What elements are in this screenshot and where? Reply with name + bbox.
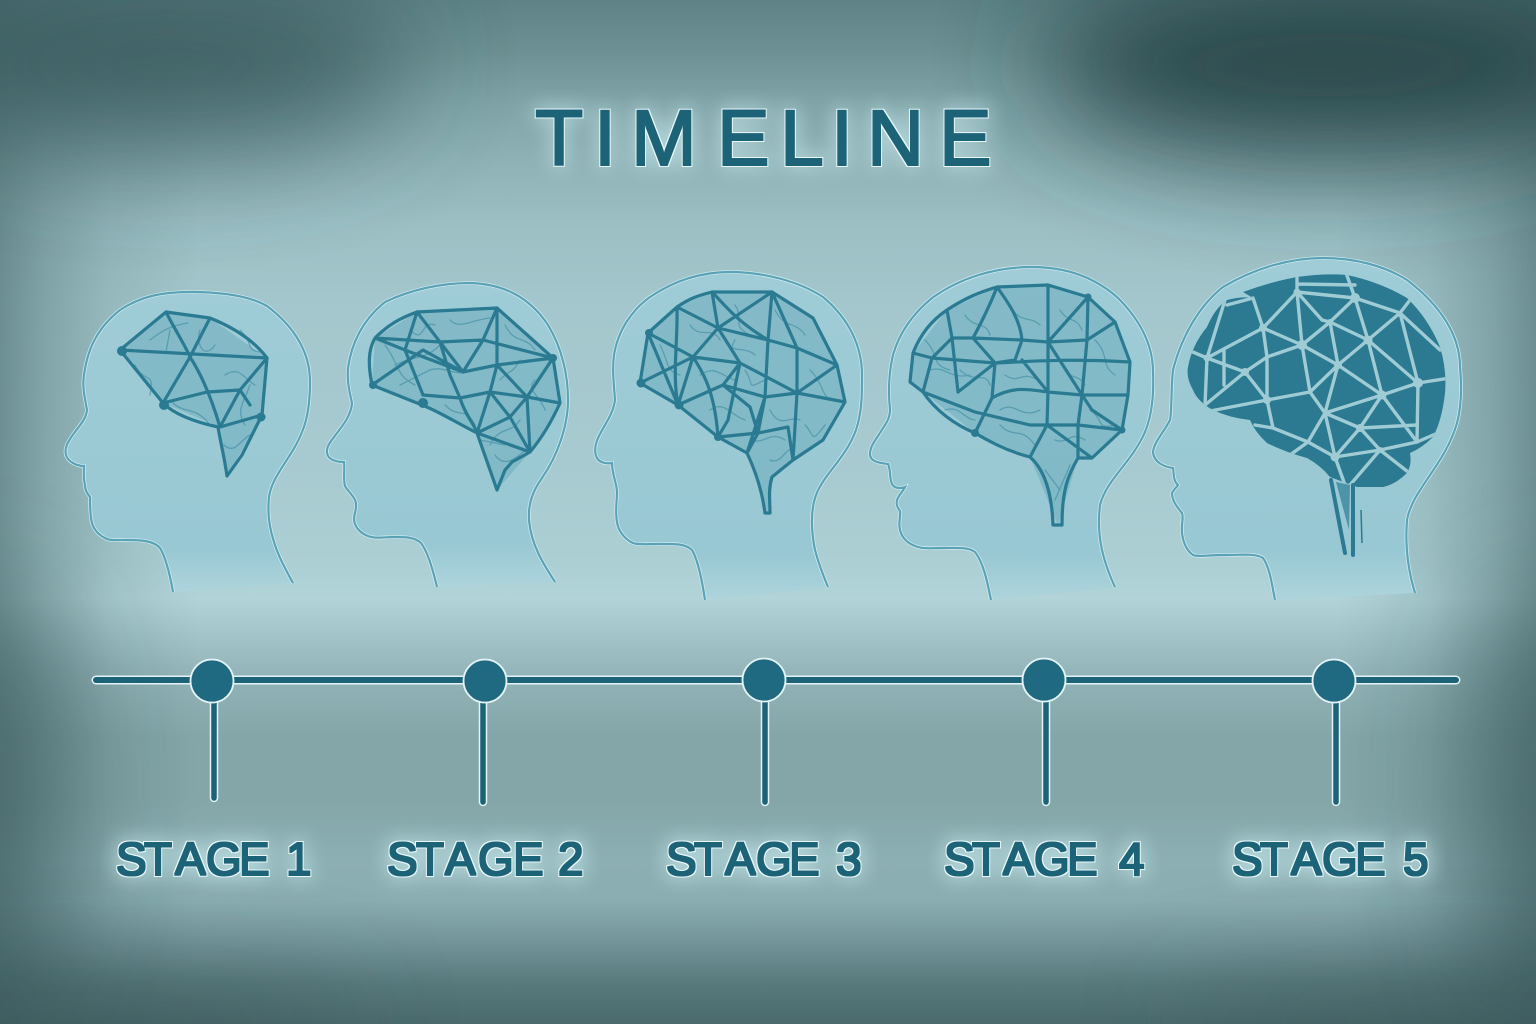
label: stage 1: STAGE 1 [116, 833, 312, 885]
brain 5 solid network [1188, 270, 1450, 555]
head 4 silhouette [870, 267, 1153, 600]
stage 4 marker [1022, 658, 1066, 802]
stage 2 head and brain [327, 283, 568, 587]
stage 5 marker [1312, 660, 1356, 802]
brain 4 mesh [910, 285, 1130, 525]
stage 1 marker [190, 660, 234, 798]
stage 3 head and brain [595, 272, 862, 600]
stage 1 head and brain [65, 292, 310, 592]
title: TIMELINE [535, 93, 992, 182]
head 3 silhouette [595, 272, 862, 600]
brain 3 mesh [636, 292, 845, 513]
label: stage 4: STAGE 4 [944, 833, 1145, 885]
label: stage 5: STAGE 5 [1232, 833, 1429, 885]
stage 2 marker [464, 660, 506, 802]
stage 4 head and brain [870, 267, 1153, 600]
brain 2 mesh [369, 308, 560, 490]
head 5 silhouette [1153, 258, 1461, 600]
head 1 silhouette [65, 292, 310, 592]
stage 5 head and brain [1153, 258, 1461, 600]
stage 3 marker [742, 658, 786, 802]
label: stage 2: STAGE 2 [387, 833, 584, 885]
head 2 silhouette [327, 283, 568, 587]
label: stage 3: STAGE 3 [666, 833, 862, 885]
brain 1 mesh [117, 312, 267, 476]
timeline axis [96, 676, 1456, 684]
